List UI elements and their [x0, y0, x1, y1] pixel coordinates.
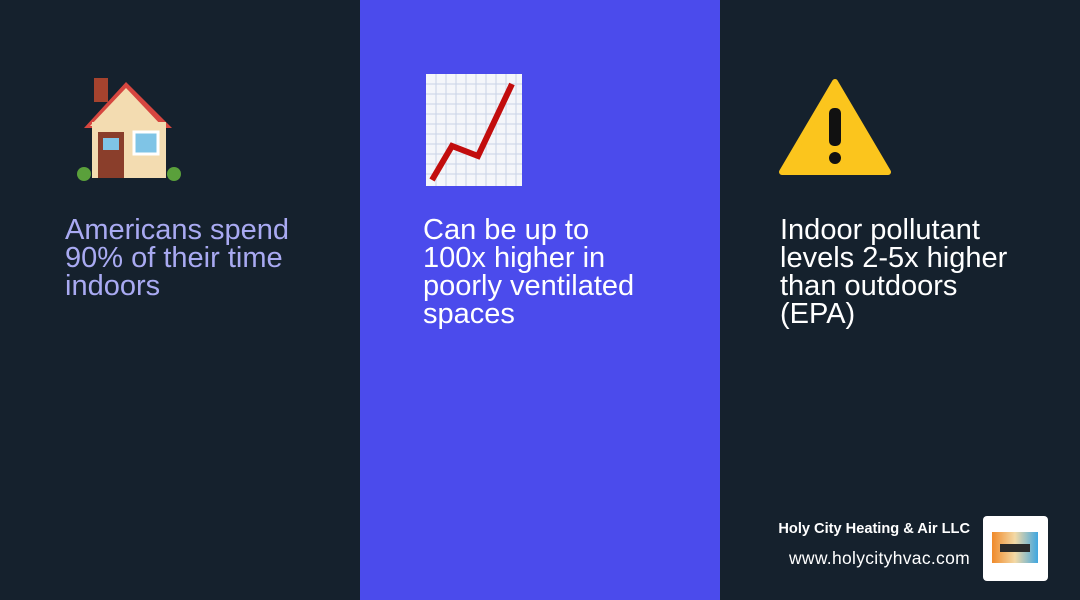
logo: [983, 516, 1048, 581]
text: americans: Americans spend: [65, 214, 289, 246]
icon: warning: [779, 79, 891, 175]
text: 100x: Can be up to: [423, 214, 589, 246]
icon: house: [77, 78, 181, 181]
text: 100x: 100x higher in: [423, 242, 605, 274]
text: epa: [780, 214, 1007, 330]
icon: chart: [426, 74, 522, 186]
text: 100x: poorly ventilated: [423, 270, 634, 302]
panel: middle: [360, 0, 720, 600]
text: americans: [65, 214, 289, 302]
website: www.holycityhvac.com: [789, 548, 970, 568]
panel: left: [0, 0, 360, 600]
text: americans: 90% of their time: [65, 242, 283, 274]
company name: Holy City Heating & Air LLC: [778, 521, 970, 537]
footer: company: [778, 516, 1048, 581]
text: americans: indoors: [65, 270, 160, 302]
text: epa: than outdoors: [780, 270, 957, 302]
text: 100x: spaces: [423, 298, 515, 330]
text: epa: (EPA): [780, 298, 855, 330]
text: epa: levels 2-5x higher: [780, 242, 1007, 274]
text: epa: Indoor pollutant: [780, 214, 980, 246]
panel: right: [720, 0, 1080, 600]
text: 100x: [423, 214, 634, 330]
